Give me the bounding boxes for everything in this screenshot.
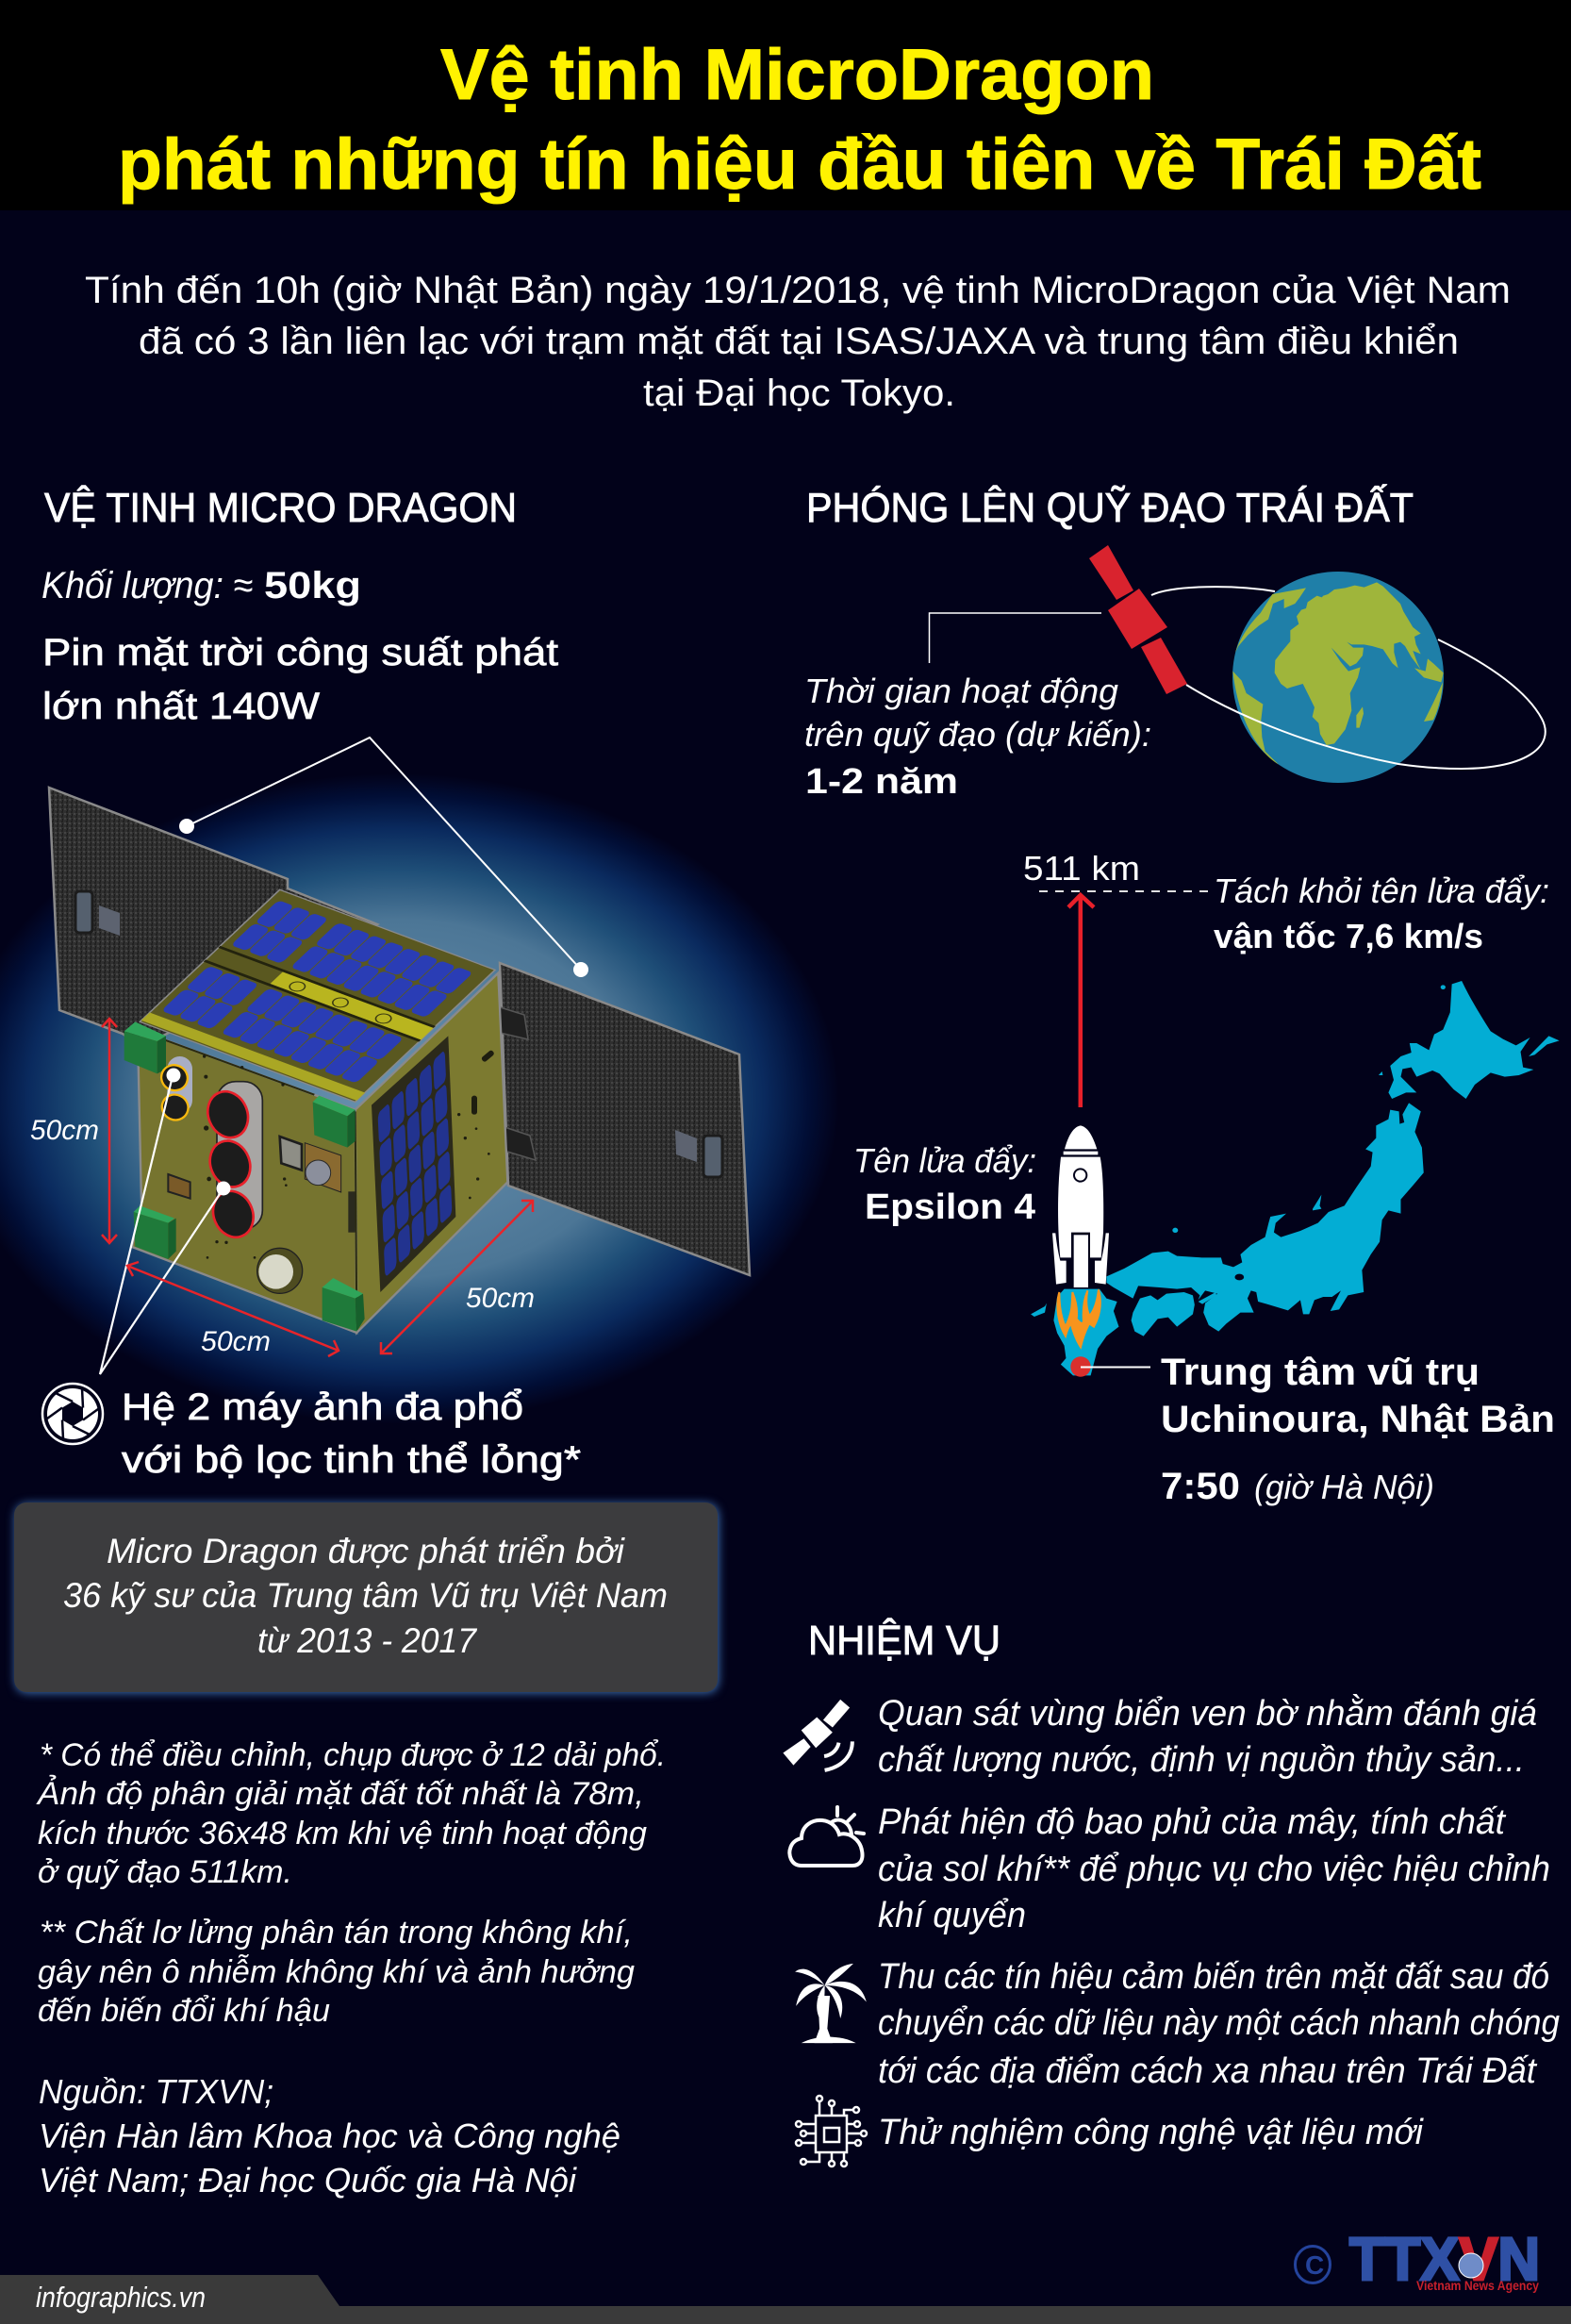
footer bar bbox=[0, 2275, 1571, 2324]
mission 1 text: Quan sát vùng biển ven bờ nhằm đánh giá bbox=[878, 1693, 1537, 1734]
intro text: tại Đại học Tokyo. bbox=[643, 373, 955, 414]
solar power spec: lớn nhất 140W bbox=[42, 686, 320, 727]
panel: developer note: từ 2013 - 2017 bbox=[257, 1621, 477, 1660]
orbit duration text: Thời gian hoạt động bbox=[804, 672, 1118, 710]
mission 1 text bbox=[878, 1693, 1537, 1780]
mission 3 text: tới các địa điểm cách xa nhau trên Trái Đất bbox=[878, 2051, 1537, 2091]
footnote 1 bbox=[36, 1737, 666, 1890]
icon: microchip bbox=[796, 2096, 867, 2166]
small cameras bbox=[157, 1056, 192, 1124]
launch site text: Uchinoura, Nhật Bản bbox=[1161, 1399, 1555, 1440]
separation text bbox=[1214, 872, 1549, 955]
solar power spec bbox=[42, 632, 558, 727]
heading: satellite: VỆ TINH MICRO DRAGON bbox=[44, 485, 517, 531]
panel: developer note: Micro Dragon được phát triển bởi bbox=[107, 1532, 626, 1570]
footnote 1: * Có thể điều chỉnh, chụp được ở 12 dải phổ. bbox=[40, 1737, 666, 1773]
separation text: Tách khỏi tên lửa đẩy: bbox=[1214, 872, 1549, 910]
orbit duration text: trên quỹ đạo (dự kiến): bbox=[804, 715, 1151, 754]
callout lines: solar panels bbox=[179, 738, 588, 977]
mission 1 text: chất lượng nước, định vị nguồn thủy sản... bbox=[878, 1740, 1525, 1780]
heading: launch: PHÓNG LÊN QUỸ ĐẠO TRÁI ĐẤT bbox=[806, 484, 1414, 531]
dimension labels: 50cm bbox=[466, 1283, 535, 1314]
dimension labels: 50cm bbox=[201, 1326, 271, 1357]
intro text: đã có 3 lần liên lạc với trạm mặt đất tại ISAS/JAXA và trung tâm điều khiển bbox=[139, 321, 1459, 362]
rocket name: Tên lửa đẩy: bbox=[853, 1141, 1036, 1180]
satellite glow bbox=[0, 773, 839, 1424]
camera description: Hệ 2 máy ảnh đa phổ bbox=[122, 1386, 523, 1428]
orbit duration text bbox=[804, 672, 1151, 802]
solar power spec: Pin mặt trời công suất phát bbox=[42, 632, 558, 673]
panel: developer note bbox=[14, 1502, 718, 1692]
launch site marker bbox=[1070, 1356, 1150, 1377]
footnote 2: gây nên ô nhiễm không khí và ảnh hưởng bbox=[38, 1954, 635, 1990]
red ascent arrow bbox=[1068, 895, 1094, 1107]
mission 4 text: Thử nghiệm công nghệ vật liệu mới bbox=[878, 2113, 1424, 2152]
dimension arrows bbox=[102, 1019, 533, 1356]
heading: mission: NHIỆM VỤ bbox=[808, 1618, 1000, 1664]
rocket name bbox=[853, 1141, 1036, 1227]
camera description bbox=[122, 1386, 581, 1481]
mission 2 text: của sol khí** để phục vụ cho việc hiệu chỉnh bbox=[878, 1850, 1550, 1889]
footnote 1: Ảnh độ phân giải mặt đất tốt nhất là 78m, bbox=[36, 1775, 644, 1812]
front face bbox=[132, 1031, 356, 1333]
launch site text: (giờ Hà Nội) bbox=[1254, 1468, 1434, 1506]
large cameras bbox=[201, 1082, 262, 1243]
left solar panel bbox=[49, 788, 377, 1047]
source: Nguồn: TTXVN; bbox=[39, 2072, 273, 2111]
footnote 2 bbox=[38, 1915, 635, 2029]
mass spec: Khối lượng: ≈ bbox=[41, 565, 253, 606]
side face bbox=[356, 973, 507, 1333]
green corner blocks bbox=[124, 1021, 365, 1332]
rocket name: Epsilon 4 bbox=[865, 1187, 1035, 1227]
mass spec: 50kg bbox=[264, 565, 361, 606]
earth globe bbox=[1232, 572, 1444, 783]
logo: TTXVN: TTXVN bbox=[1349, 2225, 1540, 2293]
dimension labels: 50cm bbox=[30, 1115, 99, 1146]
rocket flames bbox=[1057, 1289, 1100, 1347]
side solar cells bbox=[372, 1036, 455, 1292]
altitude label: 511 km bbox=[1023, 849, 1140, 888]
panel: developer note: 36 kỹ sư của Trung tâm Vũ trụ Việt Nam bbox=[63, 1576, 668, 1615]
orbit back arc bbox=[1151, 587, 1275, 595]
icon: camera shutter bbox=[42, 1384, 103, 1444]
title band bbox=[0, 0, 1571, 210]
dashed altitude line bbox=[1039, 890, 1212, 892]
icon: rocket bbox=[1052, 1125, 1109, 1287]
separation text: vận tốc 7,6 km/s bbox=[1214, 917, 1483, 955]
satellite illustration bbox=[49, 788, 750, 1333]
source bbox=[39, 2072, 620, 2200]
mission 3 text bbox=[878, 1957, 1560, 2091]
mission 2 text: Phát hiện độ bao phủ của mây, tính chất bbox=[878, 1802, 1506, 1842]
right solar panel bbox=[494, 963, 750, 1275]
title line 2: phát những tín hiệu đầu tiên về Trái Đất bbox=[118, 124, 1481, 205]
top face with solar cells bbox=[140, 889, 495, 1102]
website credit: infographics.vn bbox=[36, 2281, 206, 2314]
orbit front arc bbox=[1186, 639, 1546, 769]
logo: TTXVN: Vietnam News Agency bbox=[1416, 2278, 1539, 2293]
camera description: với bộ lọc tinh thể lỏng* bbox=[122, 1439, 581, 1481]
dimension labels bbox=[30, 1115, 535, 1357]
connector line: orbit time bbox=[930, 613, 1101, 663]
title line 1: Vệ tinh MicroDragon bbox=[440, 35, 1154, 115]
icon: cloud and sun bbox=[789, 1807, 864, 1866]
icon: red satellite bbox=[1089, 545, 1187, 694]
satellite body bbox=[124, 889, 507, 1333]
callout lines: cameras bbox=[100, 1068, 230, 1374]
source: Viện Hàn lâm Khoa học và Công nghệ bbox=[39, 2116, 620, 2155]
map of Japan bbox=[1031, 981, 1560, 1375]
footnote 1: ở quỹ đạo 511km. bbox=[38, 1854, 292, 1890]
launch site text: 7:50 bbox=[1161, 1466, 1240, 1507]
icon: palm tree bbox=[795, 1964, 867, 2043]
launch site text bbox=[1161, 1352, 1555, 1507]
mission 2 text: khí quyển bbox=[878, 1896, 1026, 1935]
launch site text: Trung tâm vũ trụ bbox=[1161, 1352, 1480, 1393]
footnote 2: đến biến đổi khí hậu bbox=[38, 1993, 330, 2029]
intro text bbox=[85, 270, 1511, 414]
footnote 1: kích thước 36x48 km khi vệ tinh hoạt động bbox=[38, 1816, 647, 1851]
icon: satellite signal bbox=[783, 1700, 852, 1770]
intro text: Tính đến 10h (giờ Nhật Bản) ngày 19/1/2018, vệ tinh MicroDragon của Việt Nam bbox=[85, 270, 1511, 311]
logo: TTXVN: C bbox=[1305, 2250, 1324, 2280]
source: Việt Nam; Đại học Quốc gia Hà Nội bbox=[39, 2161, 577, 2200]
orbit duration text: 1-2 năm bbox=[805, 762, 958, 802]
body edge and screw details bbox=[165, 1040, 495, 1330]
footnote 2: ** Chất lơ lửng phân tán trong không khí, bbox=[40, 1915, 633, 1950]
equipment details bbox=[168, 1137, 356, 1293]
mission 2 text bbox=[878, 1802, 1550, 1935]
